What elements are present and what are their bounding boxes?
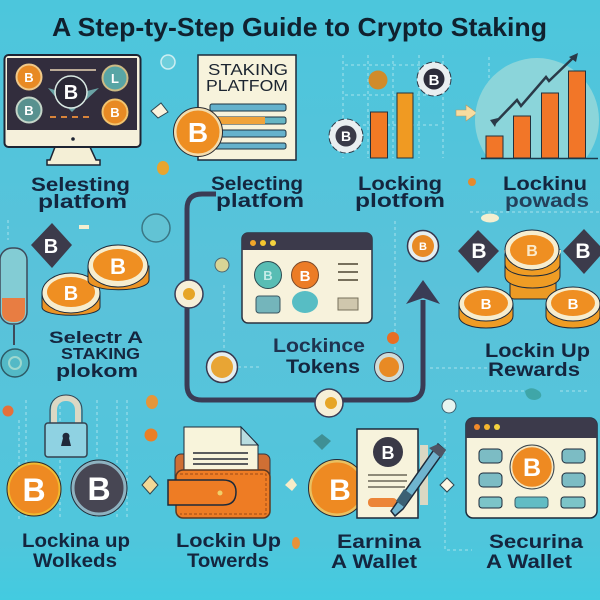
panel: contract and pen: B xyxy=(329,474,351,507)
label: selecting platform 2 xyxy=(211,174,304,212)
panel: growth chart one: B xyxy=(429,72,440,89)
label: locking platform xyxy=(355,174,445,212)
process loop arrow xyxy=(175,194,440,417)
label: selecting platform 1: Selesting xyxy=(31,175,130,196)
panel: staking platform document: B xyxy=(188,117,208,148)
label: locking tokens xyxy=(273,336,365,378)
label: earning a wallet xyxy=(331,532,422,573)
title: A Step-ty-Step Guide to Crypto Staking xyxy=(52,12,547,42)
panel: lock and coins: B xyxy=(22,472,46,508)
icons: orange dots and diamond xyxy=(2,395,158,494)
panel: wallet xyxy=(168,427,270,518)
panel: monitor: B xyxy=(110,105,120,120)
icon: small ring xyxy=(161,55,175,69)
label: locking up wolkeds: Lockina up xyxy=(22,531,130,552)
label: locking rewards: Lockinu xyxy=(503,174,587,195)
panel: app window: B xyxy=(300,268,311,285)
panel: app window xyxy=(242,233,372,323)
label: select a staking platform: Selectr A xyxy=(49,328,143,347)
label: locking up rewards: Rewards xyxy=(488,360,580,381)
icon: orange dot xyxy=(292,537,300,549)
panel: app window: B xyxy=(263,268,273,283)
label: locking up wolkeds xyxy=(22,531,130,572)
label: earning a wallet: Earnina xyxy=(337,532,422,553)
icon: small ring xyxy=(442,399,456,413)
label: select a staking platform: plokom xyxy=(56,361,138,381)
icon: arrow xyxy=(456,105,477,121)
icon: cream blob xyxy=(481,214,499,222)
panel: contract and pen xyxy=(308,429,446,518)
panel: lock and coins xyxy=(7,395,127,516)
label: earning a wallet: A Wallet xyxy=(331,552,418,573)
panel: staking platform document: PLATFOM xyxy=(206,78,288,95)
panel: coins left: B xyxy=(110,254,126,279)
panel: coins left: B xyxy=(44,236,58,258)
icon: orange dot xyxy=(468,178,476,186)
label: locking up towerds: Towerds xyxy=(187,551,269,572)
icon: teal diamond xyxy=(313,434,331,450)
label: securing a wallet: A Wallet xyxy=(486,552,573,573)
icon: cream mark xyxy=(79,225,89,229)
icon: gauge pill xyxy=(0,248,29,377)
label: securing a wallet: Securina xyxy=(489,532,583,553)
label: selecting platform 2: Selecting xyxy=(211,174,303,195)
panel: coins right: B xyxy=(526,243,538,260)
label: locking up towerds xyxy=(176,531,281,572)
label: select a staking platform: STAKING xyxy=(61,346,140,363)
panel: coins right: B xyxy=(568,296,579,313)
panel: coins right xyxy=(458,229,600,328)
label: selecting platform 1: platfom xyxy=(38,192,127,213)
label: locking tokens: Tokens xyxy=(286,357,360,378)
panel: coins right: B xyxy=(471,240,487,263)
panel: growth chart one: B xyxy=(341,128,351,144)
label: locking up towerds: Lockin Up xyxy=(176,531,281,552)
label: locking tokens: Lockince xyxy=(273,336,365,357)
label: selecting platform 1 xyxy=(31,175,130,213)
process loop arrow: B xyxy=(419,241,427,253)
panel: monitor xyxy=(4,55,140,165)
label: selecting platform 2: platfom xyxy=(216,191,304,212)
panel: coins left: B xyxy=(64,283,78,305)
icon: teal and orange blob xyxy=(525,388,541,400)
label: locking up wolkeds: Wolkeds xyxy=(33,551,117,572)
panel: contract and pen: B xyxy=(382,443,394,463)
label: locking platform: Locking xyxy=(358,174,442,195)
icon: teal circle xyxy=(142,214,170,242)
panel: dashboard window: B xyxy=(523,454,541,482)
panel: lock and coins: B xyxy=(87,471,111,507)
panel: coins left xyxy=(31,223,149,315)
icon: orange dot xyxy=(157,161,169,175)
label: locking platform: plotfom xyxy=(355,191,445,212)
panel: coins right: B xyxy=(575,240,591,263)
panel: monitor: B xyxy=(24,103,34,118)
icon: connector diamond xyxy=(440,478,454,492)
label: securing a wallet xyxy=(486,532,583,573)
panel: monitor: B xyxy=(24,70,34,85)
panel: dashboard window xyxy=(466,418,597,518)
panel: coins right: B xyxy=(481,296,492,313)
label: locking rewards: powads xyxy=(505,191,589,212)
panel: monitor: B xyxy=(64,82,78,104)
panel: growth chart one xyxy=(329,62,451,158)
icon: connector diamond xyxy=(285,478,297,491)
panel: monitor: L xyxy=(111,71,119,86)
label: locking up rewards xyxy=(485,341,590,381)
panel: growth chart two xyxy=(475,53,599,160)
panel: staking platform document xyxy=(174,55,296,160)
icon: connector diamond xyxy=(151,103,168,118)
label: locking rewards xyxy=(503,174,589,212)
panel: staking platform document: STAKING xyxy=(208,62,288,79)
label: locking up rewards: Lockin Up xyxy=(485,341,590,362)
label: select a staking platform xyxy=(49,328,143,381)
